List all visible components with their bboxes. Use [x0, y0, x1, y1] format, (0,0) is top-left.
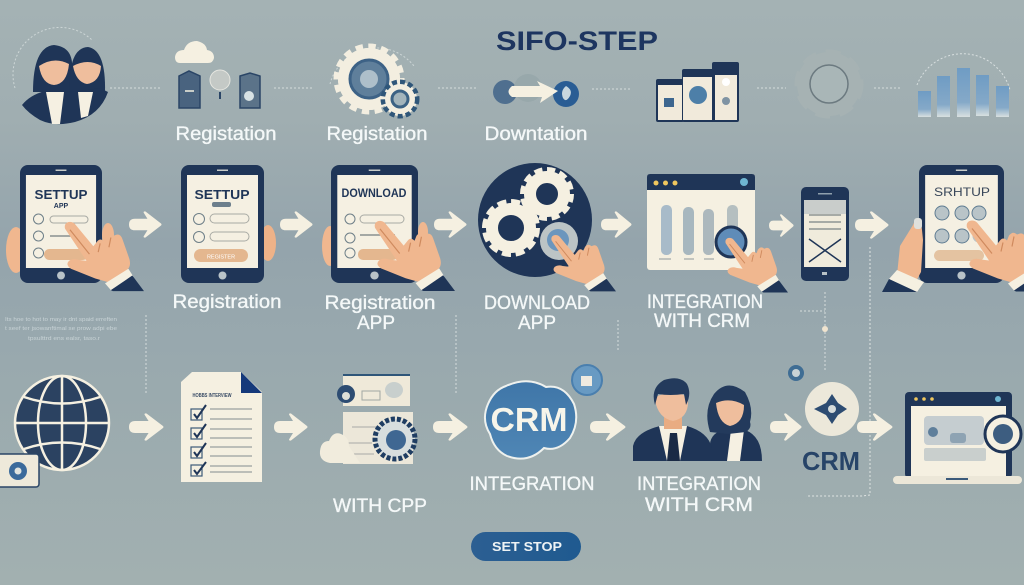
icon: two women [13, 27, 108, 124]
title: SIFO-STEP [496, 26, 658, 56]
note text: t seef ter jsowanftimal se prow adpi ebe [5, 326, 117, 332]
step: tablet setup icons: SRHTUP [934, 185, 990, 199]
step: phone with envelope [801, 187, 849, 281]
label: registration app: Registration [324, 293, 436, 314]
pin [210, 70, 230, 90]
label: integration with crm: INTEGRATION [647, 292, 763, 313]
arrow [129, 413, 163, 441]
badge right [240, 73, 260, 108]
arrow [129, 211, 162, 238]
dot on connector [822, 326, 828, 332]
label: integration with crm: WITH CRM [645, 495, 753, 516]
step: tablet setup registration: SETTUP [194, 187, 250, 202]
icon: crm cloud: CRM [490, 401, 568, 438]
icon: globe [15, 376, 109, 470]
step: tablet setup app [6, 165, 144, 291]
step: gears in navy circle [478, 163, 616, 291]
label: downtation: Downtation [484, 124, 588, 145]
label: integration with crm: INTEGRATION [637, 474, 761, 495]
label: registation 2: Registation [326, 124, 428, 145]
label: download app: APP [518, 313, 556, 334]
label: registration: Registration [172, 292, 282, 313]
gear top [523, 170, 571, 218]
arrow [601, 211, 632, 238]
label: download app [484, 293, 590, 334]
arrow [857, 413, 892, 441]
label: registration app: APP [357, 313, 395, 334]
cloud [175, 41, 214, 63]
arrow [769, 214, 794, 237]
step: tablet setup app: APP [54, 203, 69, 210]
button [540, 222, 578, 260]
icon: phones row [656, 62, 739, 122]
note text: tpsulttrd ens ealsr, taso.r [28, 336, 100, 342]
label: registation 1: Registation [176, 124, 276, 145]
arrow [434, 211, 467, 238]
button: set stop: SET STOP [492, 539, 562, 554]
top row connectors [110, 88, 902, 496]
arrow [280, 211, 313, 238]
icon: small gear card [0, 454, 39, 487]
label: integration with crm [647, 292, 763, 332]
icon: crm compass circle [805, 382, 859, 436]
icon: man and woman [633, 378, 762, 461]
icon: bar chart [917, 54, 1010, 117]
step: tablet setup app: SETTUP [34, 187, 88, 202]
icon: app cards with seal [320, 374, 415, 464]
icon: checklist document: HOBBS INTERVIEW [192, 393, 232, 399]
gear left [485, 202, 537, 254]
icon: gears [330, 48, 417, 116]
arrow [433, 413, 467, 441]
arrow [590, 413, 625, 441]
icon: checklist document [181, 372, 262, 482]
label: registration app [324, 293, 436, 334]
icon: crm cloud [485, 381, 576, 459]
icon: small round badge [788, 365, 804, 381]
step: tablet download: DOWNLOAD [342, 186, 407, 200]
arrow [770, 413, 802, 441]
label: integration with crm: WITH CRM [654, 311, 750, 332]
step: tablet setup icons [882, 165, 1024, 292]
step: tablet setup registration [181, 165, 276, 283]
icon: small badge [572, 365, 602, 395]
step: tablet setup registration: REGISTER [207, 254, 235, 260]
label: with cpp: WITH CPP [333, 496, 427, 517]
step: tablet download [322, 165, 455, 291]
label: integration: INTEGRATION [470, 474, 594, 495]
arrow [274, 413, 308, 441]
icon: cloud and badges [175, 41, 260, 108]
label: download app: DOWNLOAD [484, 293, 590, 314]
icon: laptop [893, 392, 1022, 484]
note text: Its hoe to hot to may ir dnt spaid erreften [5, 317, 117, 323]
icon: arrow to link [493, 74, 579, 107]
label: integration with crm [637, 474, 761, 516]
icon: grey gear [797, 52, 861, 116]
arrow [855, 211, 888, 239]
step: browser window [647, 174, 788, 293]
label: crm: CRM [802, 446, 860, 476]
badge left [179, 71, 200, 108]
button: set stop [471, 532, 581, 561]
note text [5, 317, 117, 342]
